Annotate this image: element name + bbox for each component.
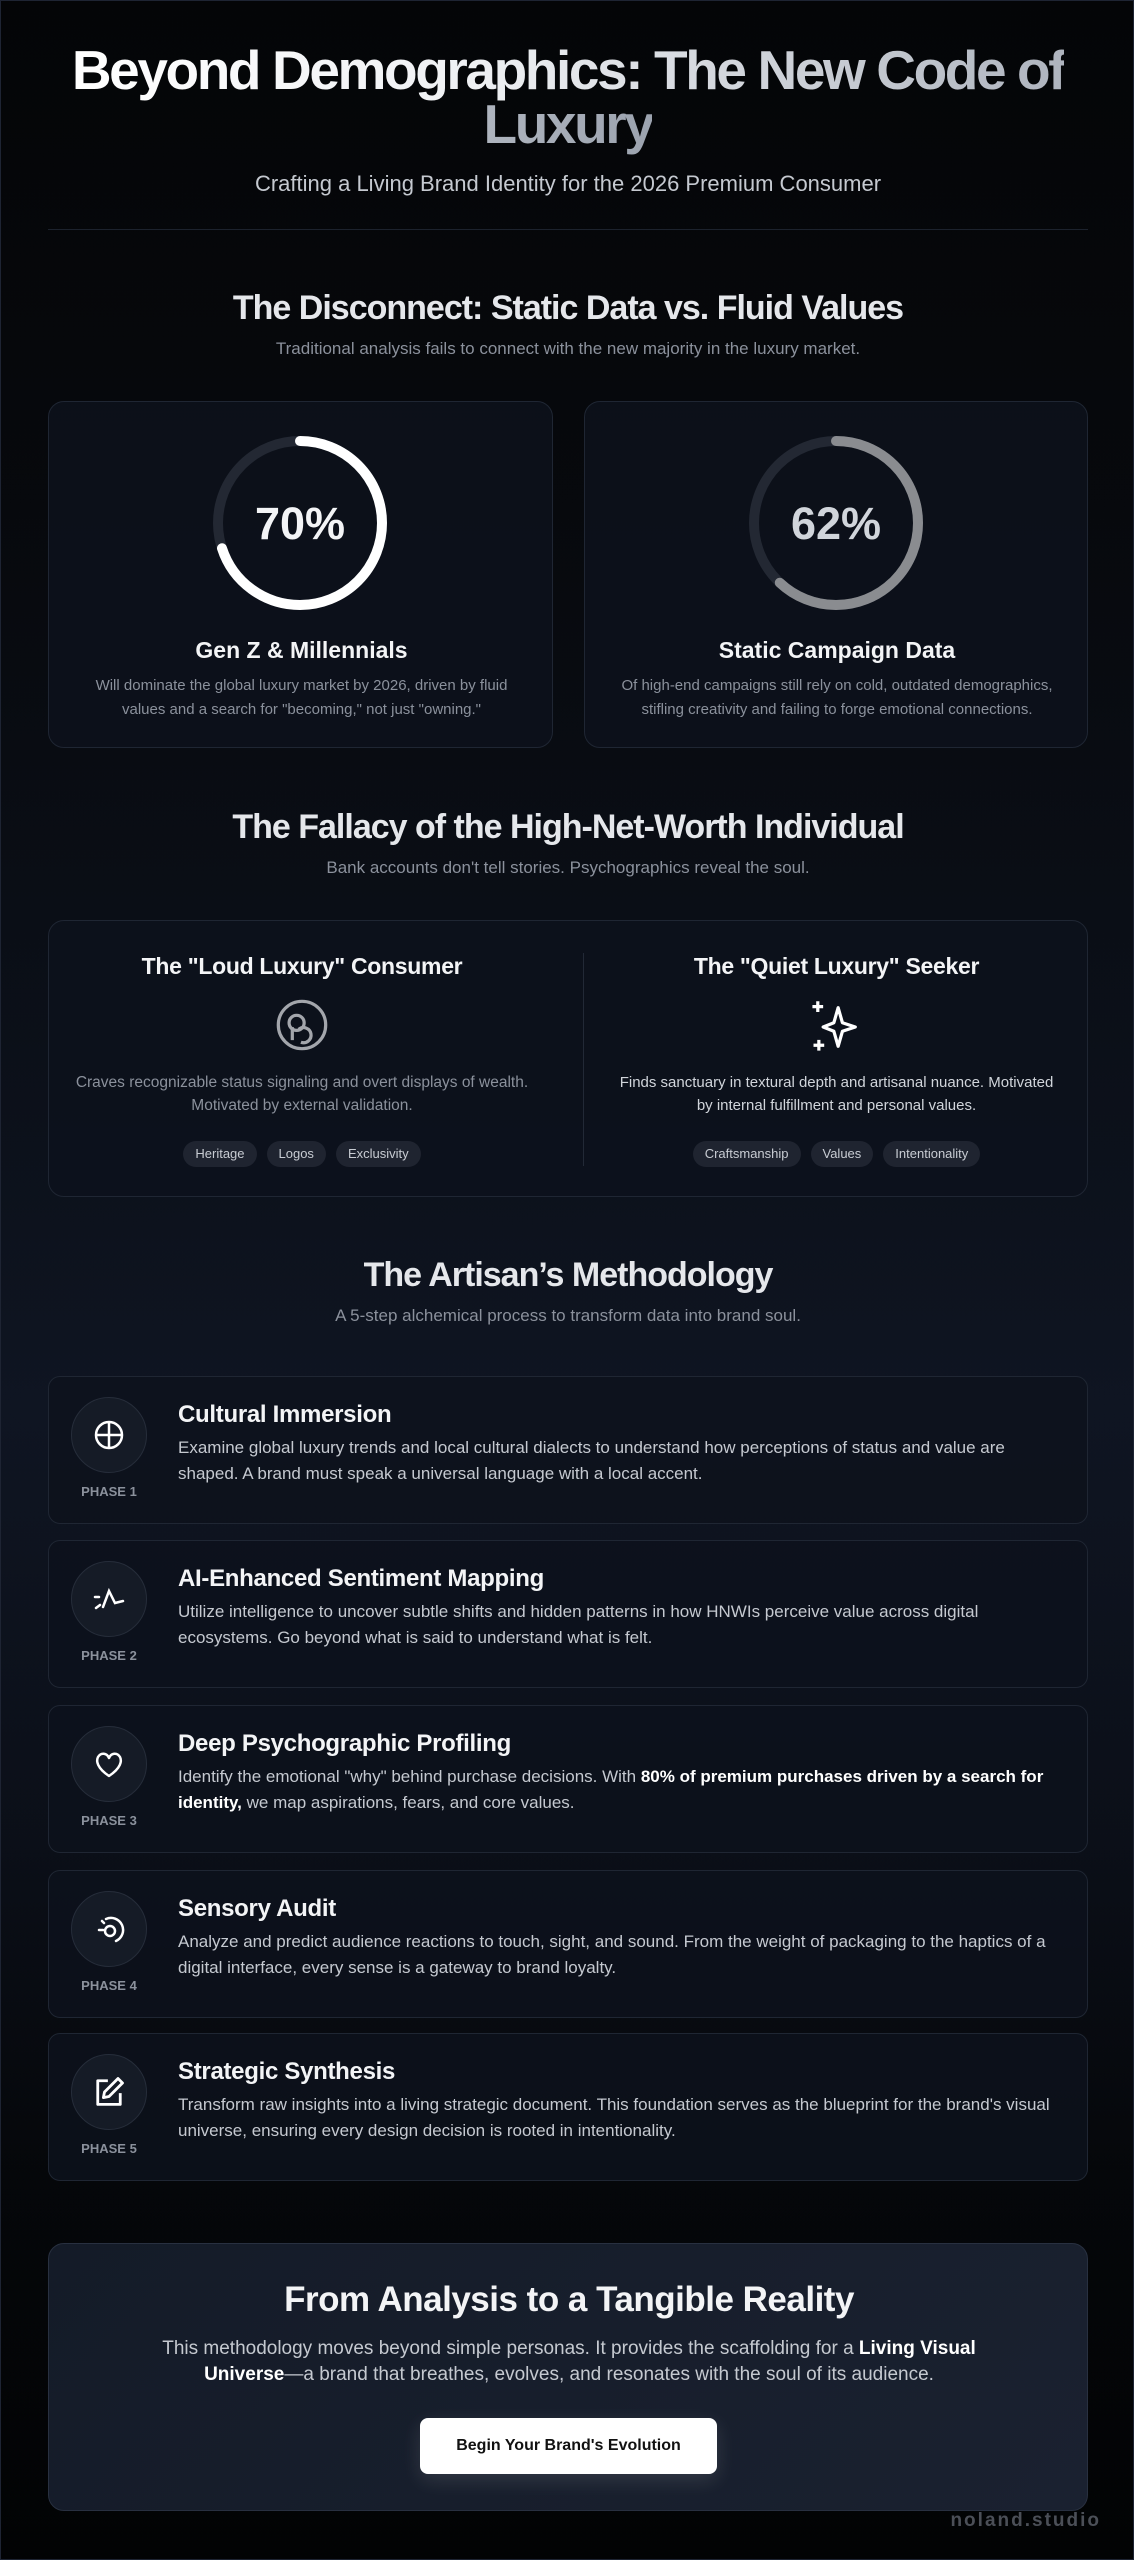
icon: globe	[71, 1397, 147, 1473]
phase 3: Deep Psychographic Profiling	[178, 1730, 511, 1757]
phase 5: Strategic Synthesis	[178, 2058, 395, 2085]
persona: quiet luxury: The "Quiet Luxury" Seeker	[694, 953, 979, 979]
persona: loud luxury	[76, 953, 528, 1167]
persona: quiet luxury	[620, 953, 1053, 1167]
phase 5	[48, 2033, 1088, 2181]
phase 1: Cultural Immersion	[178, 1401, 391, 1428]
subtitle: Crafting a Living Brand Identity for the 2026 Premium Consumer	[255, 171, 881, 196]
cta title: From Analysis to a Tangible Reality	[284, 2280, 854, 2319]
subheading: methodology: A 5-step alchemical process to transform data into brand soul.	[335, 1306, 801, 1325]
heading: fallacy: The Fallacy of the High-Net-Worth Individual	[232, 808, 904, 846]
phase 2: AI-Enhanced Sentiment Mapping	[178, 1565, 544, 1592]
heading: disconnect: The Disconnect: Static Data vs. Fluid Values	[233, 289, 903, 327]
persona: loud luxury: Craves recognizable status signaling and overt displays of wealth. Motivated by external validation.	[76, 1074, 528, 1114]
phase 4: Sensory Audit	[178, 1895, 336, 1922]
persona: loud luxury: The "Loud Luxury" Consumer	[142, 953, 462, 979]
heading: methodology: The Artisan’s Methodology	[364, 1256, 772, 1294]
tags: Intentionality	[895, 1146, 968, 1161]
ring chart 70%	[213, 436, 387, 610]
stat description: Will dominate the global luxury market by 2026, driven by fluid values and a search for "becoming," not just "owning."	[96, 677, 507, 718]
phase 1: Examine global luxury trends and local cultural dialects to understand how perceptions of status and value are shaped. A brand must speak a universal language with a local accent.	[178, 1438, 1005, 1483]
cta text: This methodology moves beyond simple personas. It provides the scaffolding for a Living Visual Universe—a brand that breathes, evolves, and resonates with the soul of its audience.	[162, 2338, 976, 2385]
stat title: Gen Z & Millennials	[195, 637, 408, 663]
phase 2	[48, 1540, 1088, 1688]
subheading: disconnect: Traditional analysis fails to connect with the new majority in the luxury market.	[276, 339, 860, 358]
phase 3: PHASE 3	[81, 1813, 137, 1828]
phase 1: PHASE 1	[81, 1484, 137, 1499]
phase 5: PHASE 5	[81, 2141, 137, 2156]
tags	[693, 1141, 980, 1167]
phase 4: PHASE 4	[81, 1978, 137, 1993]
icon: sense	[71, 1891, 147, 1967]
title: Beyond Demographics: The New Code of	[72, 39, 1064, 101]
phase 4: Analyze and predict audience reactions to touch, sight, and sound. From the weight of packaging to the haptics of a digital interface, every sense is a gateway to brand loyalty.	[178, 1932, 1046, 1977]
tags: Logos	[279, 1146, 314, 1161]
panel: call to action	[48, 2243, 1088, 2511]
icon: sparkles	[812, 1001, 857, 1051]
ring chart 62%: 62%	[791, 498, 881, 549]
tags: Heritage	[195, 1146, 245, 1161]
panel: personas	[48, 920, 1088, 1197]
phase 1	[48, 1376, 1088, 1524]
ring chart 62%	[749, 436, 923, 610]
stat description: Of high-end campaigns still rely on cold, outdated demographics, stifling creativity and failing to forge emotional connections.	[621, 677, 1053, 718]
icon: heart	[71, 1726, 147, 1802]
subheading: fallacy: Bank accounts don't tell stories. Psychographics reveal the soul.	[326, 858, 810, 877]
tags	[183, 1141, 421, 1167]
panel: static data stat	[584, 401, 1088, 748]
title	[72, 39, 1064, 155]
panel: gen z stat	[48, 401, 553, 748]
stat title: Static Campaign Data	[719, 637, 955, 663]
icon: pencil	[71, 2054, 147, 2130]
title: Luxury	[484, 93, 652, 155]
button: Begin Your Brand's Evolution	[456, 2437, 681, 2454]
phase 5: Transform raw insights into a living strategic document. This foundation serves as the blueprint for the brand's visual universe, ensuring every design decision is rooted in intentionality.	[178, 2095, 1050, 2140]
button	[420, 2418, 717, 2474]
icon: coin	[276, 1000, 328, 1050]
tags: Values	[822, 1146, 861, 1161]
phase 3: Identify the emotional "why" behind purchase decisions. With 80% of premium purchases driven by a search for identity, we map aspirations, fears, and core values.	[178, 1767, 1043, 1812]
phase 3	[48, 1705, 1088, 1853]
persona: quiet luxury: Finds sanctuary in textural depth and artisanal nuance. Motivated by internal fulfillment and personal values.	[620, 1074, 1053, 1114]
footer brand: noland.studio	[950, 2510, 1101, 2531]
phase 4	[48, 1870, 1088, 2018]
icon: sentiment	[71, 1561, 147, 1637]
phase 2: Utilize intelligence to uncover subtle shifts and hidden patterns in how HNWIs perceive value across digital ecosystems. Go beyond what is said to understand what is felt.	[178, 1602, 978, 1647]
ring chart 70%: 70%	[255, 498, 345, 549]
tags: Exclusivity	[348, 1146, 409, 1161]
tags: Craftsmanship	[705, 1146, 788, 1161]
phase 2: PHASE 2	[81, 1648, 137, 1663]
